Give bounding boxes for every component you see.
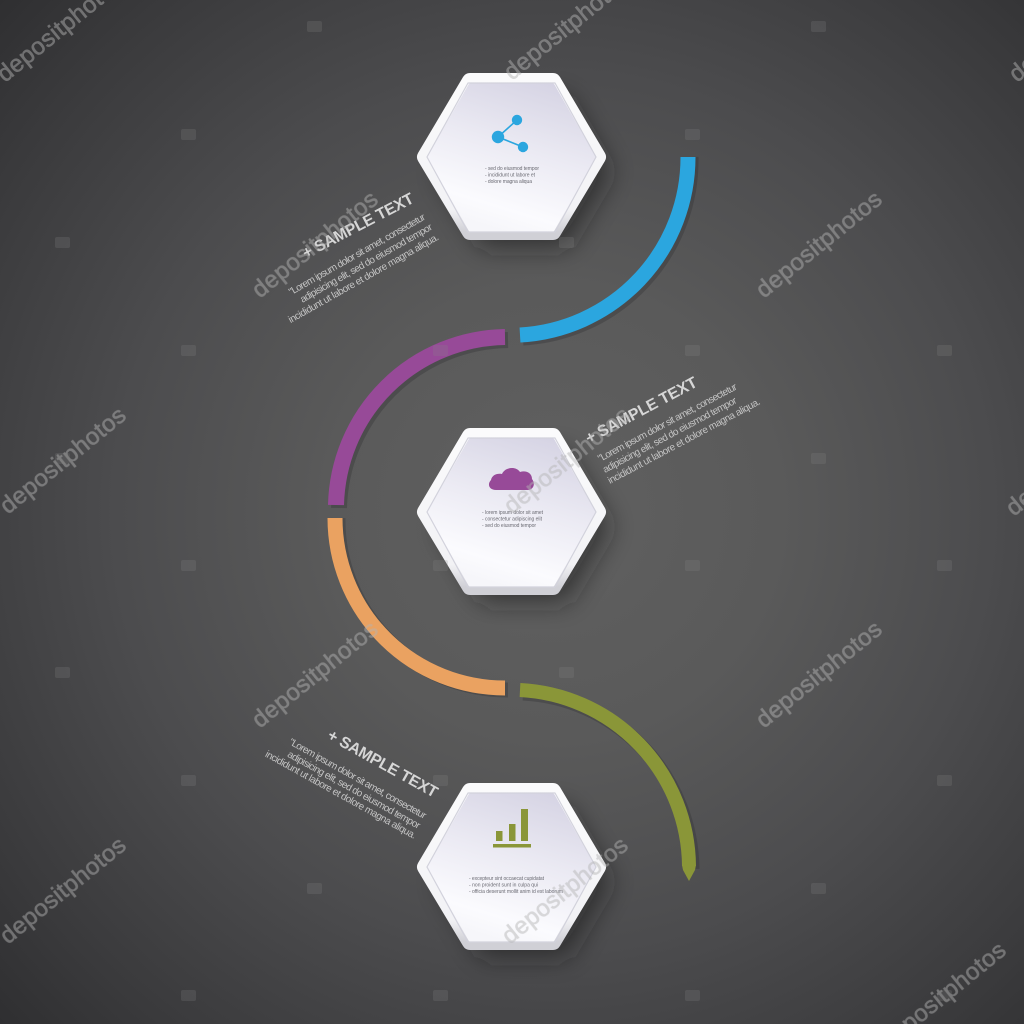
callout: middle right sample text: "Lorem ipsum dolor sit amet, consectetur <box>596 381 740 465</box>
icon: bar chart <box>493 809 531 848</box>
arc: blue segment <box>520 157 691 338</box>
text block: bottom hexagon: - non proident sunt in culpa qui <box>469 882 538 888</box>
text block: bottom hexagon <box>469 876 563 895</box>
callout: middle right sample text: adipisicing elit, sed do eiusmod tempor <box>601 395 739 476</box>
text block: top hexagon: - sed do eiusmod tempor <box>485 166 539 172</box>
text block: middle hexagon <box>482 510 544 529</box>
text block: middle hexagon: - sed do eiusmod tempor <box>482 523 536 529</box>
watermark: repeated stock photo marks: depositphotos <box>751 616 887 734</box>
callout: lower left sample text: + SAMPLE TEXT <box>324 727 440 802</box>
text block: top hexagon <box>485 166 539 185</box>
text block: middle hexagon: - lorem ipsum dolor sit amet <box>482 510 544 516</box>
callout: lower left sample text: "Lorem ipsum dolor sit amet, consectetur <box>287 737 428 822</box>
watermark: repeated stock photo marks: depositphotos <box>497 832 633 950</box>
callout: lower left sample text: adipisicing elit, sed do eiusmod tempor <box>285 749 422 832</box>
arc: purple segment <box>336 337 508 508</box>
watermark: repeated stock photo marks: depositphotos <box>499 402 635 520</box>
text block: top hexagon: - dolore magna aliqua <box>485 179 532 185</box>
callout: upper left sample text: + SAMPLE TEXT <box>300 190 417 262</box>
card: bottom hexagon with bar chart icon <box>425 791 611 957</box>
arc: olive segment with pointed tip <box>520 690 696 881</box>
icon: cloud <box>489 468 534 490</box>
text block: bottom hexagon: - officia deserunt mollit anim id est laborum <box>469 889 563 895</box>
arc: orange segment <box>335 518 508 690</box>
callout: upper left sample text: "Lorem ipsum dolor sit amet, consectetur <box>287 212 428 298</box>
watermark: repeated stock photo marks: depositphotos <box>247 616 383 734</box>
callout: middle right sample text: + SAMPLE TEXT <box>583 374 701 448</box>
callout: lower left sample text: incididunt ut labore et dolore magna aliqua. <box>263 749 418 842</box>
text block: middle hexagon: - consectetur adipiscing elit <box>482 516 543 522</box>
icon: share <box>492 115 528 152</box>
watermark: repeated stock photo marks: depositphotos <box>247 186 383 304</box>
text block: top hexagon: - incididunt ut labore et <box>485 172 536 178</box>
callout: middle right sample text: incididunt ut labore et dolore magna aliqua. <box>606 397 762 487</box>
callout: middle right sample text <box>583 374 762 487</box>
callout: upper left sample text: adipisicing elit, sed do eiusmod tempor <box>299 222 435 305</box>
callout: upper left sample text <box>287 190 441 326</box>
watermark: repeated stock photo marks: depositphotos <box>751 186 887 304</box>
callout: upper left sample text: incididunt ut labore et dolore magna aliqua. <box>287 232 441 326</box>
card: middle hexagon with cloud icon <box>425 436 611 602</box>
card: top hexagon with share icon <box>425 81 611 247</box>
text block: bottom hexagon: - excepteur sint occaecat cupidatat <box>469 876 545 882</box>
